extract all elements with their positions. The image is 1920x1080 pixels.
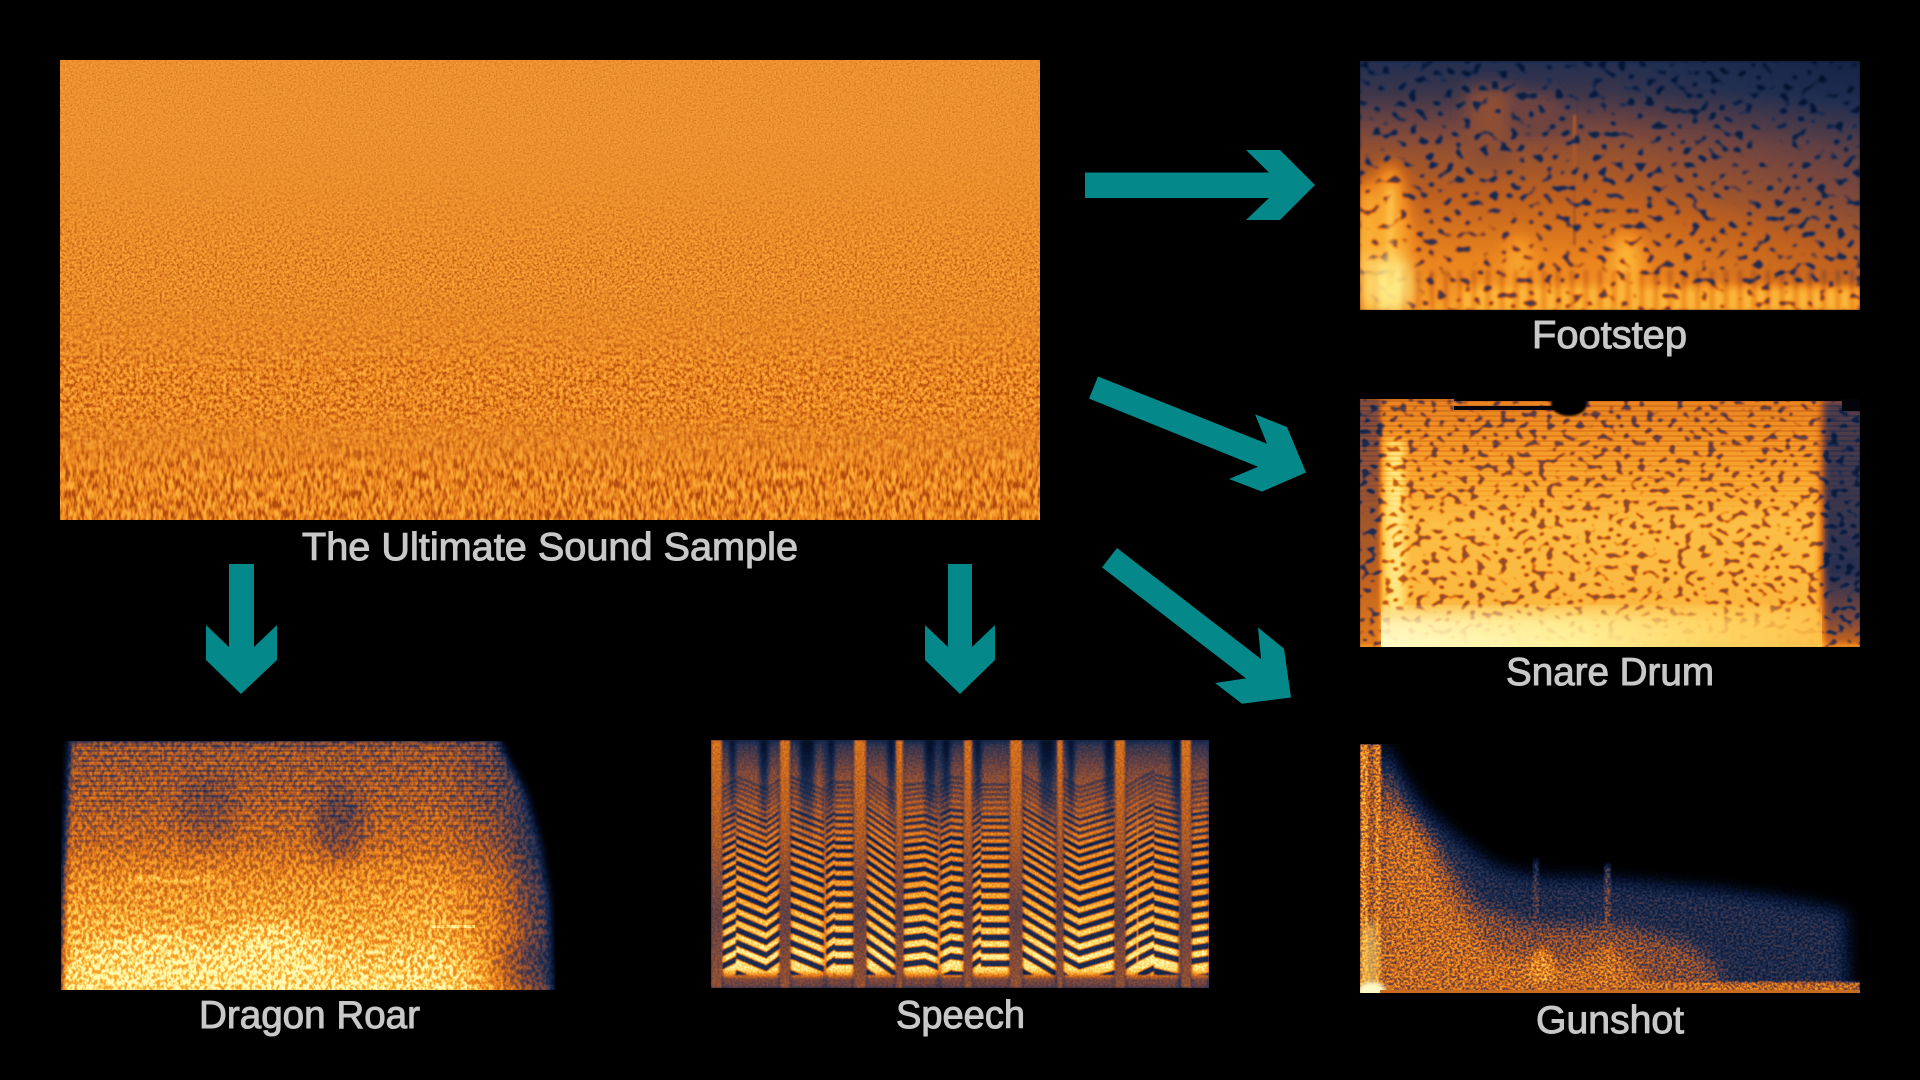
arrow: to dragon roar bbox=[206, 564, 277, 694]
spectrogram: snare drum bbox=[1360, 399, 1860, 647]
spectrogram: speech bbox=[642, 674, 1351, 1080]
label: footstep: Footstep bbox=[1532, 314, 1687, 357]
arrow: to snare drum bbox=[1089, 376, 1306, 492]
panel: the ultimate sound sample bbox=[60, 60, 1040, 569]
arrow: to footstep bbox=[1085, 150, 1315, 220]
panel: dragon roar bbox=[61, 730, 565, 1037]
spectrogram: dragon roar bbox=[61, 741, 555, 990]
label: speech: Speech bbox=[896, 994, 1025, 1037]
label: dragon roar: Dragon Roar bbox=[199, 994, 420, 1037]
panel: speech bbox=[642, 674, 1351, 1080]
label: gunshot: Gunshot bbox=[1536, 999, 1684, 1042]
panel: snare drum bbox=[1360, 399, 1860, 686]
arrow: to speech bbox=[925, 564, 995, 694]
label: the ultimate sound sample: The Ultimate Sound Sample bbox=[302, 526, 798, 569]
arrow: to gunshot bbox=[1102, 548, 1291, 704]
spectrogram: footstep bbox=[1360, 61, 1860, 310]
spectrogram: uniform orange noise bbox=[60, 60, 1040, 520]
spectrogram: gunshot bbox=[1360, 744, 1860, 993]
panel: gunshot bbox=[1358, 735, 1860, 1042]
panel: footstep bbox=[1356, 61, 1860, 357]
label: snare drum: Snare Drum bbox=[1506, 651, 1714, 694]
